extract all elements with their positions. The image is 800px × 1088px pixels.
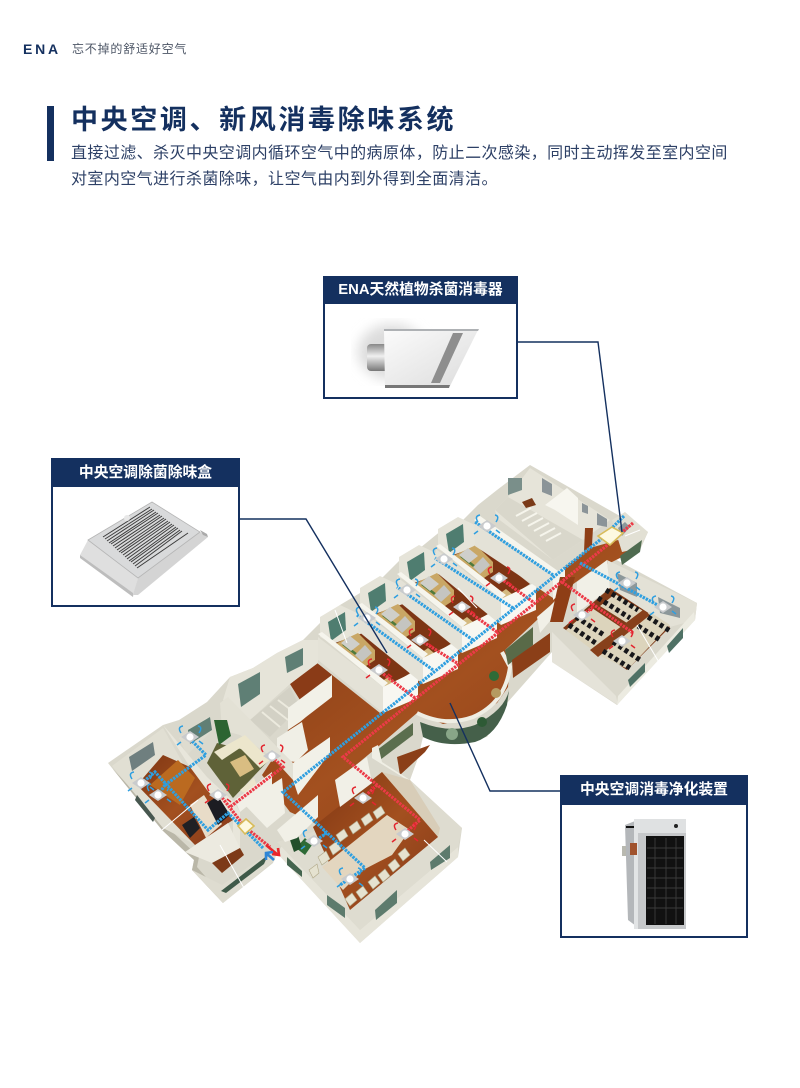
main wood floors and corridor <box>262 540 640 830</box>
top stair room and restrooms <box>474 468 648 600</box>
building shell <box>108 465 697 943</box>
conference room <box>243 757 462 930</box>
intro text <box>71 144 728 188</box>
title: 中央空调、新风消毒除味系统 <box>71 105 456 135</box>
brand header <box>23 41 187 57</box>
panel: deodorizing box <box>51 458 240 607</box>
office rows <box>318 517 536 713</box>
curved lobby glass wall <box>372 627 550 780</box>
back rooms and stairs <box>220 640 332 795</box>
panel heading: 中央空调除菌除味盒 <box>79 465 212 481</box>
intro text: 直接过滤、杀灭中央空调内循环空气中的病原体，防止二次感染，同时主动挥发至室内空间 <box>71 145 728 162</box>
panel heading <box>53 460 238 487</box>
icon: purifier cabinet <box>622 819 686 929</box>
icon: vent box <box>80 502 208 597</box>
panel heading <box>325 278 516 304</box>
panel heading <box>562 777 746 805</box>
right classroom wing <box>537 560 697 705</box>
ceiling vents <box>128 515 676 887</box>
red duct network <box>220 523 633 847</box>
leader line: purification device <box>450 703 561 791</box>
leader line: deodorizing box <box>239 519 387 653</box>
panel heading: ENA天然植物杀菌消毒器 <box>338 282 503 298</box>
title accent bar <box>47 106 54 161</box>
left office and lounge <box>112 717 276 903</box>
panel: purification device <box>560 775 748 938</box>
logo: ENA: ENA <box>23 41 61 57</box>
blue duct network <box>142 516 663 885</box>
leader line: sterilizer <box>518 342 622 532</box>
intro text: 对室内空气进行杀菌除味，让空气由内到外得到全面清洁。 <box>71 171 498 188</box>
slogan: 忘不掉的舒适好空气 <box>72 42 187 56</box>
panel: ENA sterilizer <box>323 276 518 399</box>
panel heading: 中央空调消毒净化装置 <box>580 782 728 798</box>
icon: sterilizer unit <box>354 320 479 388</box>
purifier boxes and air arrows <box>162 527 660 888</box>
